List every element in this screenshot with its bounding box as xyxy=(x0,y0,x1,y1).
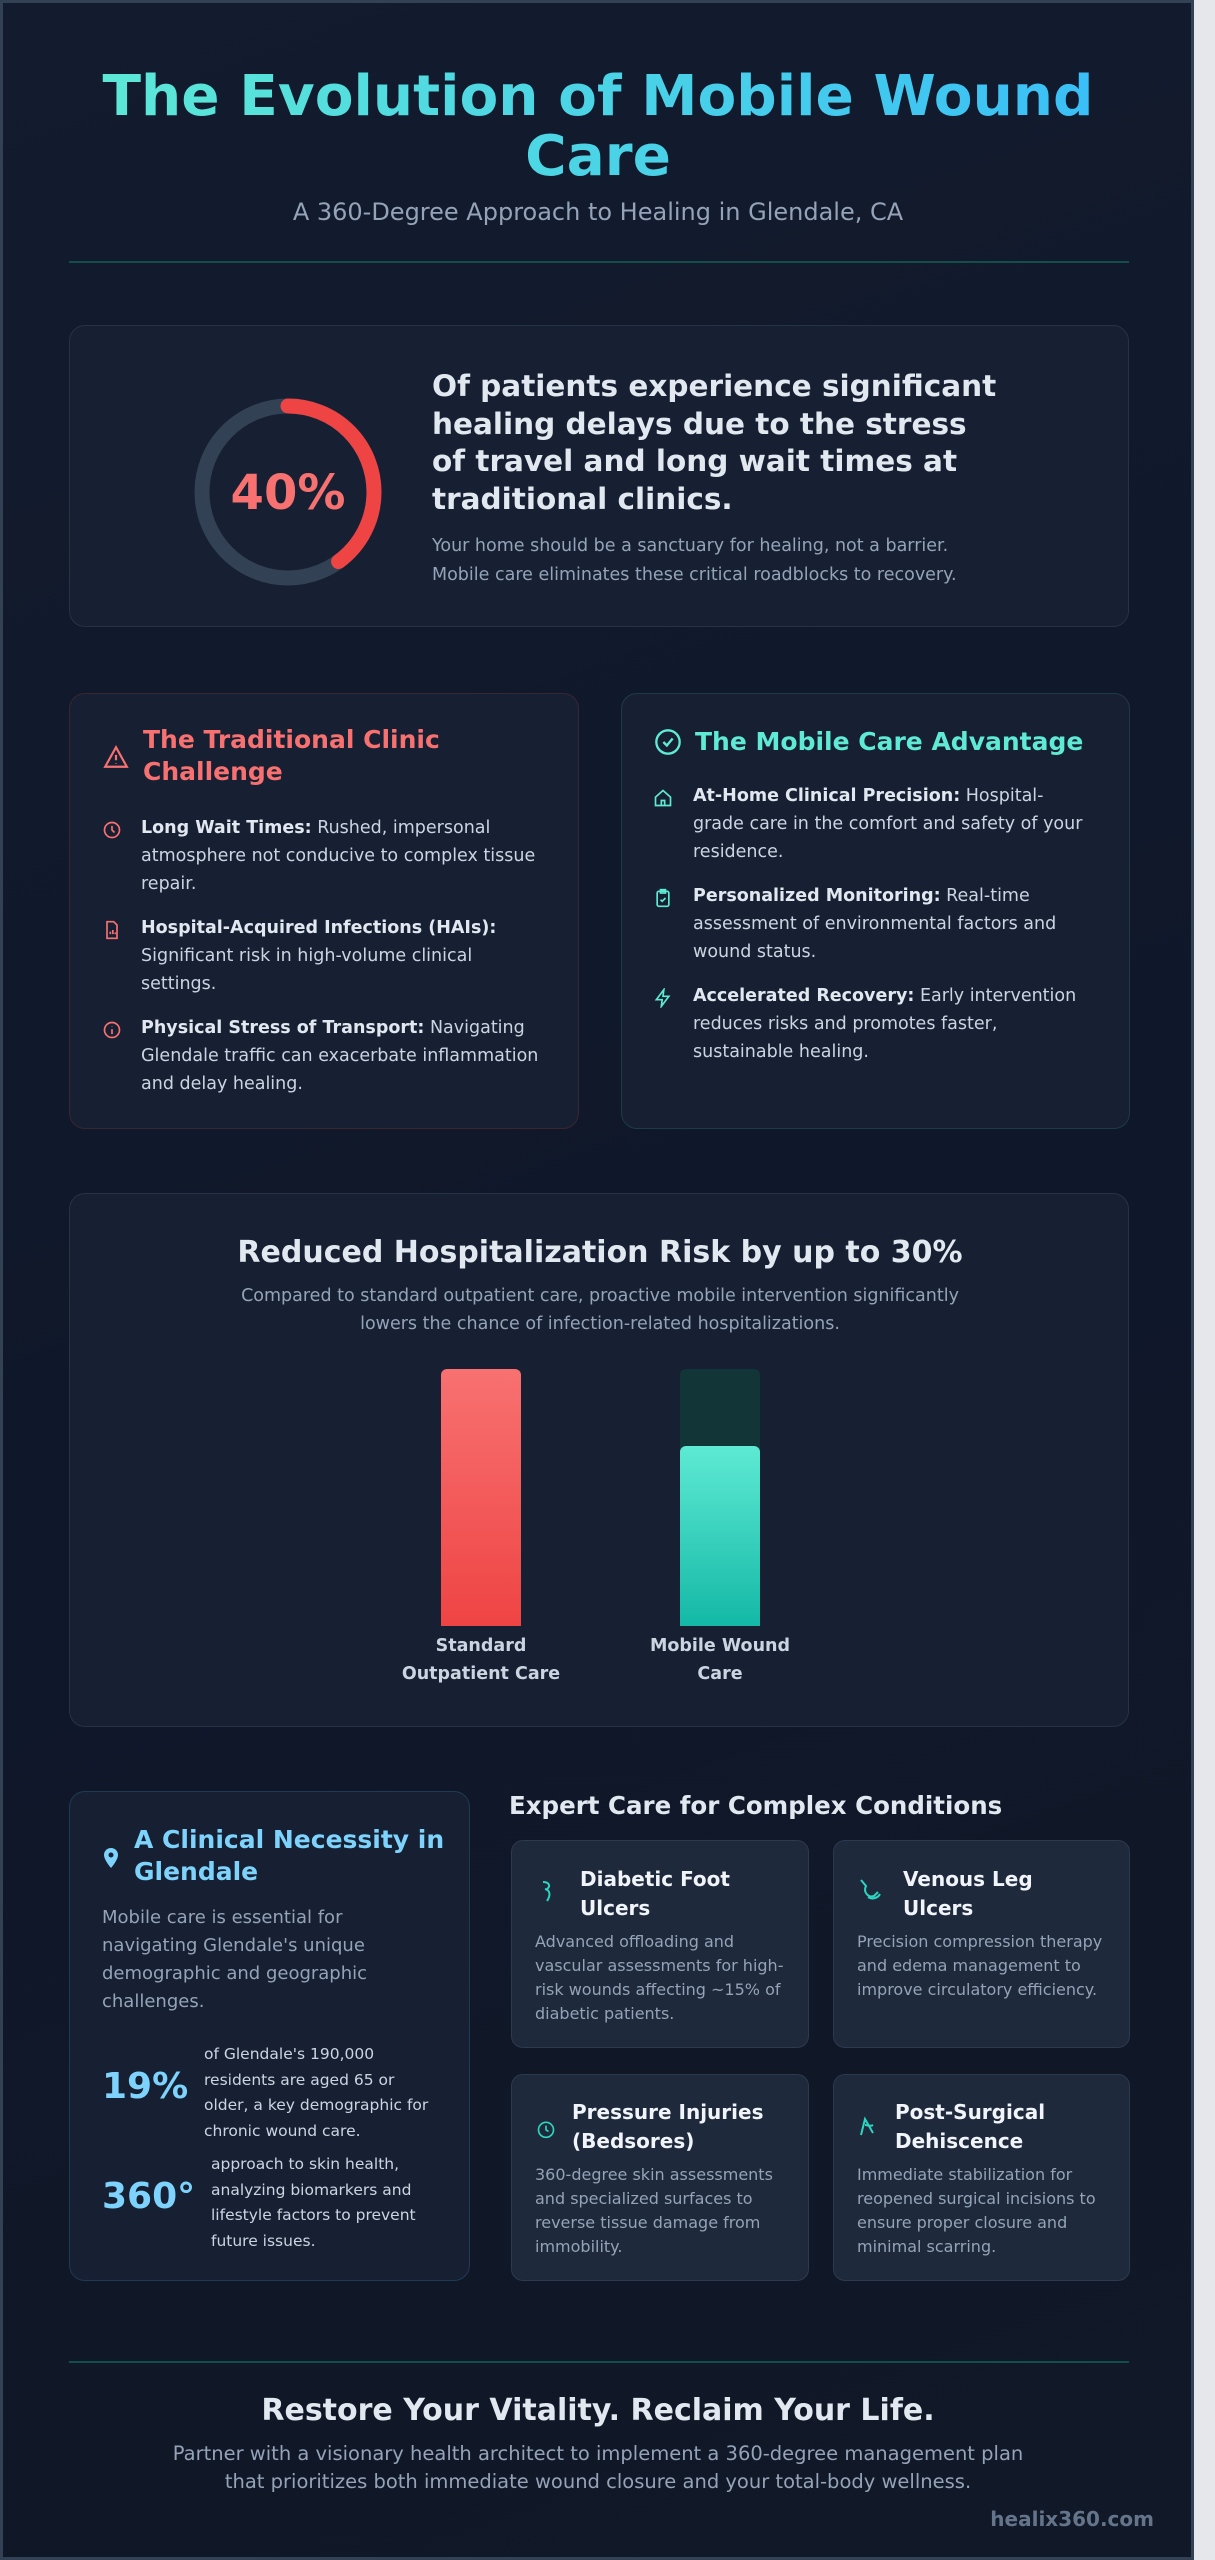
card: post-surgical dehiscence xyxy=(833,2074,1130,2281)
heading: expert care: Expert Care for Complex Conditions xyxy=(509,1791,1002,1820)
label: standard xyxy=(402,1636,560,1684)
icon xyxy=(543,1881,550,1902)
heading xyxy=(143,725,440,786)
card: diabetic foot ulcers xyxy=(511,1840,809,2048)
card: post-surgical dehiscence: Immediate stabilization for reopened surgical incisions to ensure proper closure and minimal scarring. xyxy=(857,2165,1096,2256)
bar: standard care xyxy=(441,1369,521,1626)
card: pressure injuries: Pressure Injuries xyxy=(572,2100,763,2124)
donut chart 40%: 40% xyxy=(231,465,345,521)
panel: traditional clinic challenge xyxy=(69,693,579,1129)
card: diabetic foot ulcers: Diabetic Foot xyxy=(580,1867,730,1891)
footer text: Partner with a visionary health architect to implement a 360-degree management plan xyxy=(173,2442,1023,2465)
icon xyxy=(860,2116,874,2136)
footer text xyxy=(173,2442,1023,2493)
item: at-home: At-Home Clinical Precision: Hospital-grade care in the comfort and safety of your residence. xyxy=(693,786,1082,862)
item: monitoring: Personalized Monitoring: Real-time assessment of environmental factors and wound status. xyxy=(693,886,1056,962)
icon: pin xyxy=(104,1848,118,1868)
chart title: Reduced Hospitalization Risk by up to 30% xyxy=(237,1235,963,1270)
panel: stat 40% xyxy=(69,325,1129,627)
stat headline: Of patients experience significant healing delays due to the stress of travel and long wait times at traditional clinics. xyxy=(432,369,996,516)
title xyxy=(43,67,1153,187)
heading: The Traditional Clinic xyxy=(143,725,440,754)
icon: warning xyxy=(103,745,129,768)
donut chart 40% xyxy=(194,398,382,586)
chart subtitle: Compared to standard outpatient care, proactive mobile intervention significantly xyxy=(241,1286,959,1306)
label: mobile xyxy=(650,1636,790,1684)
stat: 19% xyxy=(102,2045,428,2140)
footer heading: Restore Your Vitality. Reclaim Your Life. xyxy=(261,2393,935,2428)
icon xyxy=(860,1879,881,1900)
card: post-surgical dehiscence: Post-Surgical xyxy=(895,2100,1045,2124)
card: venous leg ulcers xyxy=(833,1840,1130,2048)
subtitle: A 360-Degree Approach to Healing in Glendale, CA xyxy=(293,198,903,226)
label: mobile: Care xyxy=(697,1664,743,1684)
card: venous leg ulcers: Precision compression therapy and edema management to improve circulatory efficiency. xyxy=(857,1932,1102,1999)
card: venous leg ulcers: Venous Leg xyxy=(903,1867,1033,1891)
footer text: that prioritizes both immediate wound closure and your total-body wellness. xyxy=(225,2470,971,2493)
stat: 360: 360° xyxy=(102,2176,195,2217)
stat description: Your home should be a sanctuary for healing, not a barrier. xyxy=(432,536,948,556)
card: venous leg ulcers: Ulcers xyxy=(903,1896,973,1920)
description: Mobile care is essential for navigating Glendale's unique demographic and geographic challenges. xyxy=(102,1907,367,2012)
title: The Evolution of Mobile Wound xyxy=(103,64,1093,129)
item: transport stress: Physical Stress of Transport: Navigating Glendale traffic can exacerbate inflammation and delay healing. xyxy=(141,1018,538,1094)
heading: Challenge xyxy=(143,757,283,786)
heading: A Clinical Necessity in xyxy=(134,1825,444,1854)
stat description xyxy=(432,536,957,585)
card: pressure injuries: 360-degree skin assessments and specialized surfaces to reverse tissue damage from immobility. xyxy=(535,2165,773,2256)
item: long wait: Long Wait Times: Rushed, impersonal atmosphere not conducive to complex tissue repair. xyxy=(141,818,535,894)
brand: healix360.com xyxy=(990,2507,1154,2531)
heading: The Mobile Care Advantage xyxy=(695,727,1083,756)
title: Care xyxy=(525,124,671,189)
card: diabetic foot ulcers: Advanced offloading and vascular assessments for high-risk wounds affecting ~15% of diabetic patients. xyxy=(535,1932,783,2023)
panel: hospitalization chart xyxy=(69,1193,1129,1727)
label: standard: Standard xyxy=(436,1636,526,1656)
card: diabetic foot ulcers: Ulcers xyxy=(580,1896,650,1920)
heading xyxy=(134,1825,444,1886)
stat: 360 xyxy=(102,2155,416,2250)
chart subtitle xyxy=(241,1286,959,1334)
bar: mobile care xyxy=(680,1369,760,1626)
icon: clock xyxy=(538,2122,554,2138)
label: standard: Outpatient Care xyxy=(402,1664,560,1684)
chart subtitle: lowers the chance of infection-related hospitalizations. xyxy=(360,1314,840,1334)
icon: check circle xyxy=(655,729,681,755)
stat: 19%: of Glendale's 190,000 residents are aged 65 or older, a key demographic for chronic wound care. xyxy=(204,2045,428,2140)
label: mobile: Mobile Wound xyxy=(650,1636,790,1656)
panel: clinical necessity in Glendale xyxy=(69,1791,470,2281)
item: recovery: Accelerated Recovery: Early intervention reduces risks and promotes faster, sustainable healing. xyxy=(693,986,1076,1062)
stat: 19%: 19% xyxy=(102,2066,188,2107)
stat: 360: approach to skin health, analyzing biomarkers and lifestyle factors to prevent future issues. xyxy=(211,2155,416,2250)
panel: mobile care advantage xyxy=(621,693,1130,1129)
card: pressure injuries xyxy=(511,2074,809,2281)
item: infections: Hospital-Acquired Infections (HAIs): Significant risk in high-volume clinical settings. xyxy=(141,918,496,994)
heading: Glendale xyxy=(134,1857,258,1886)
stat description: Mobile care eliminates these critical roadblocks to recovery. xyxy=(432,565,957,585)
card: post-surgical dehiscence: Dehiscence xyxy=(895,2129,1023,2153)
card: pressure injuries: (Bedsores) xyxy=(572,2129,694,2153)
